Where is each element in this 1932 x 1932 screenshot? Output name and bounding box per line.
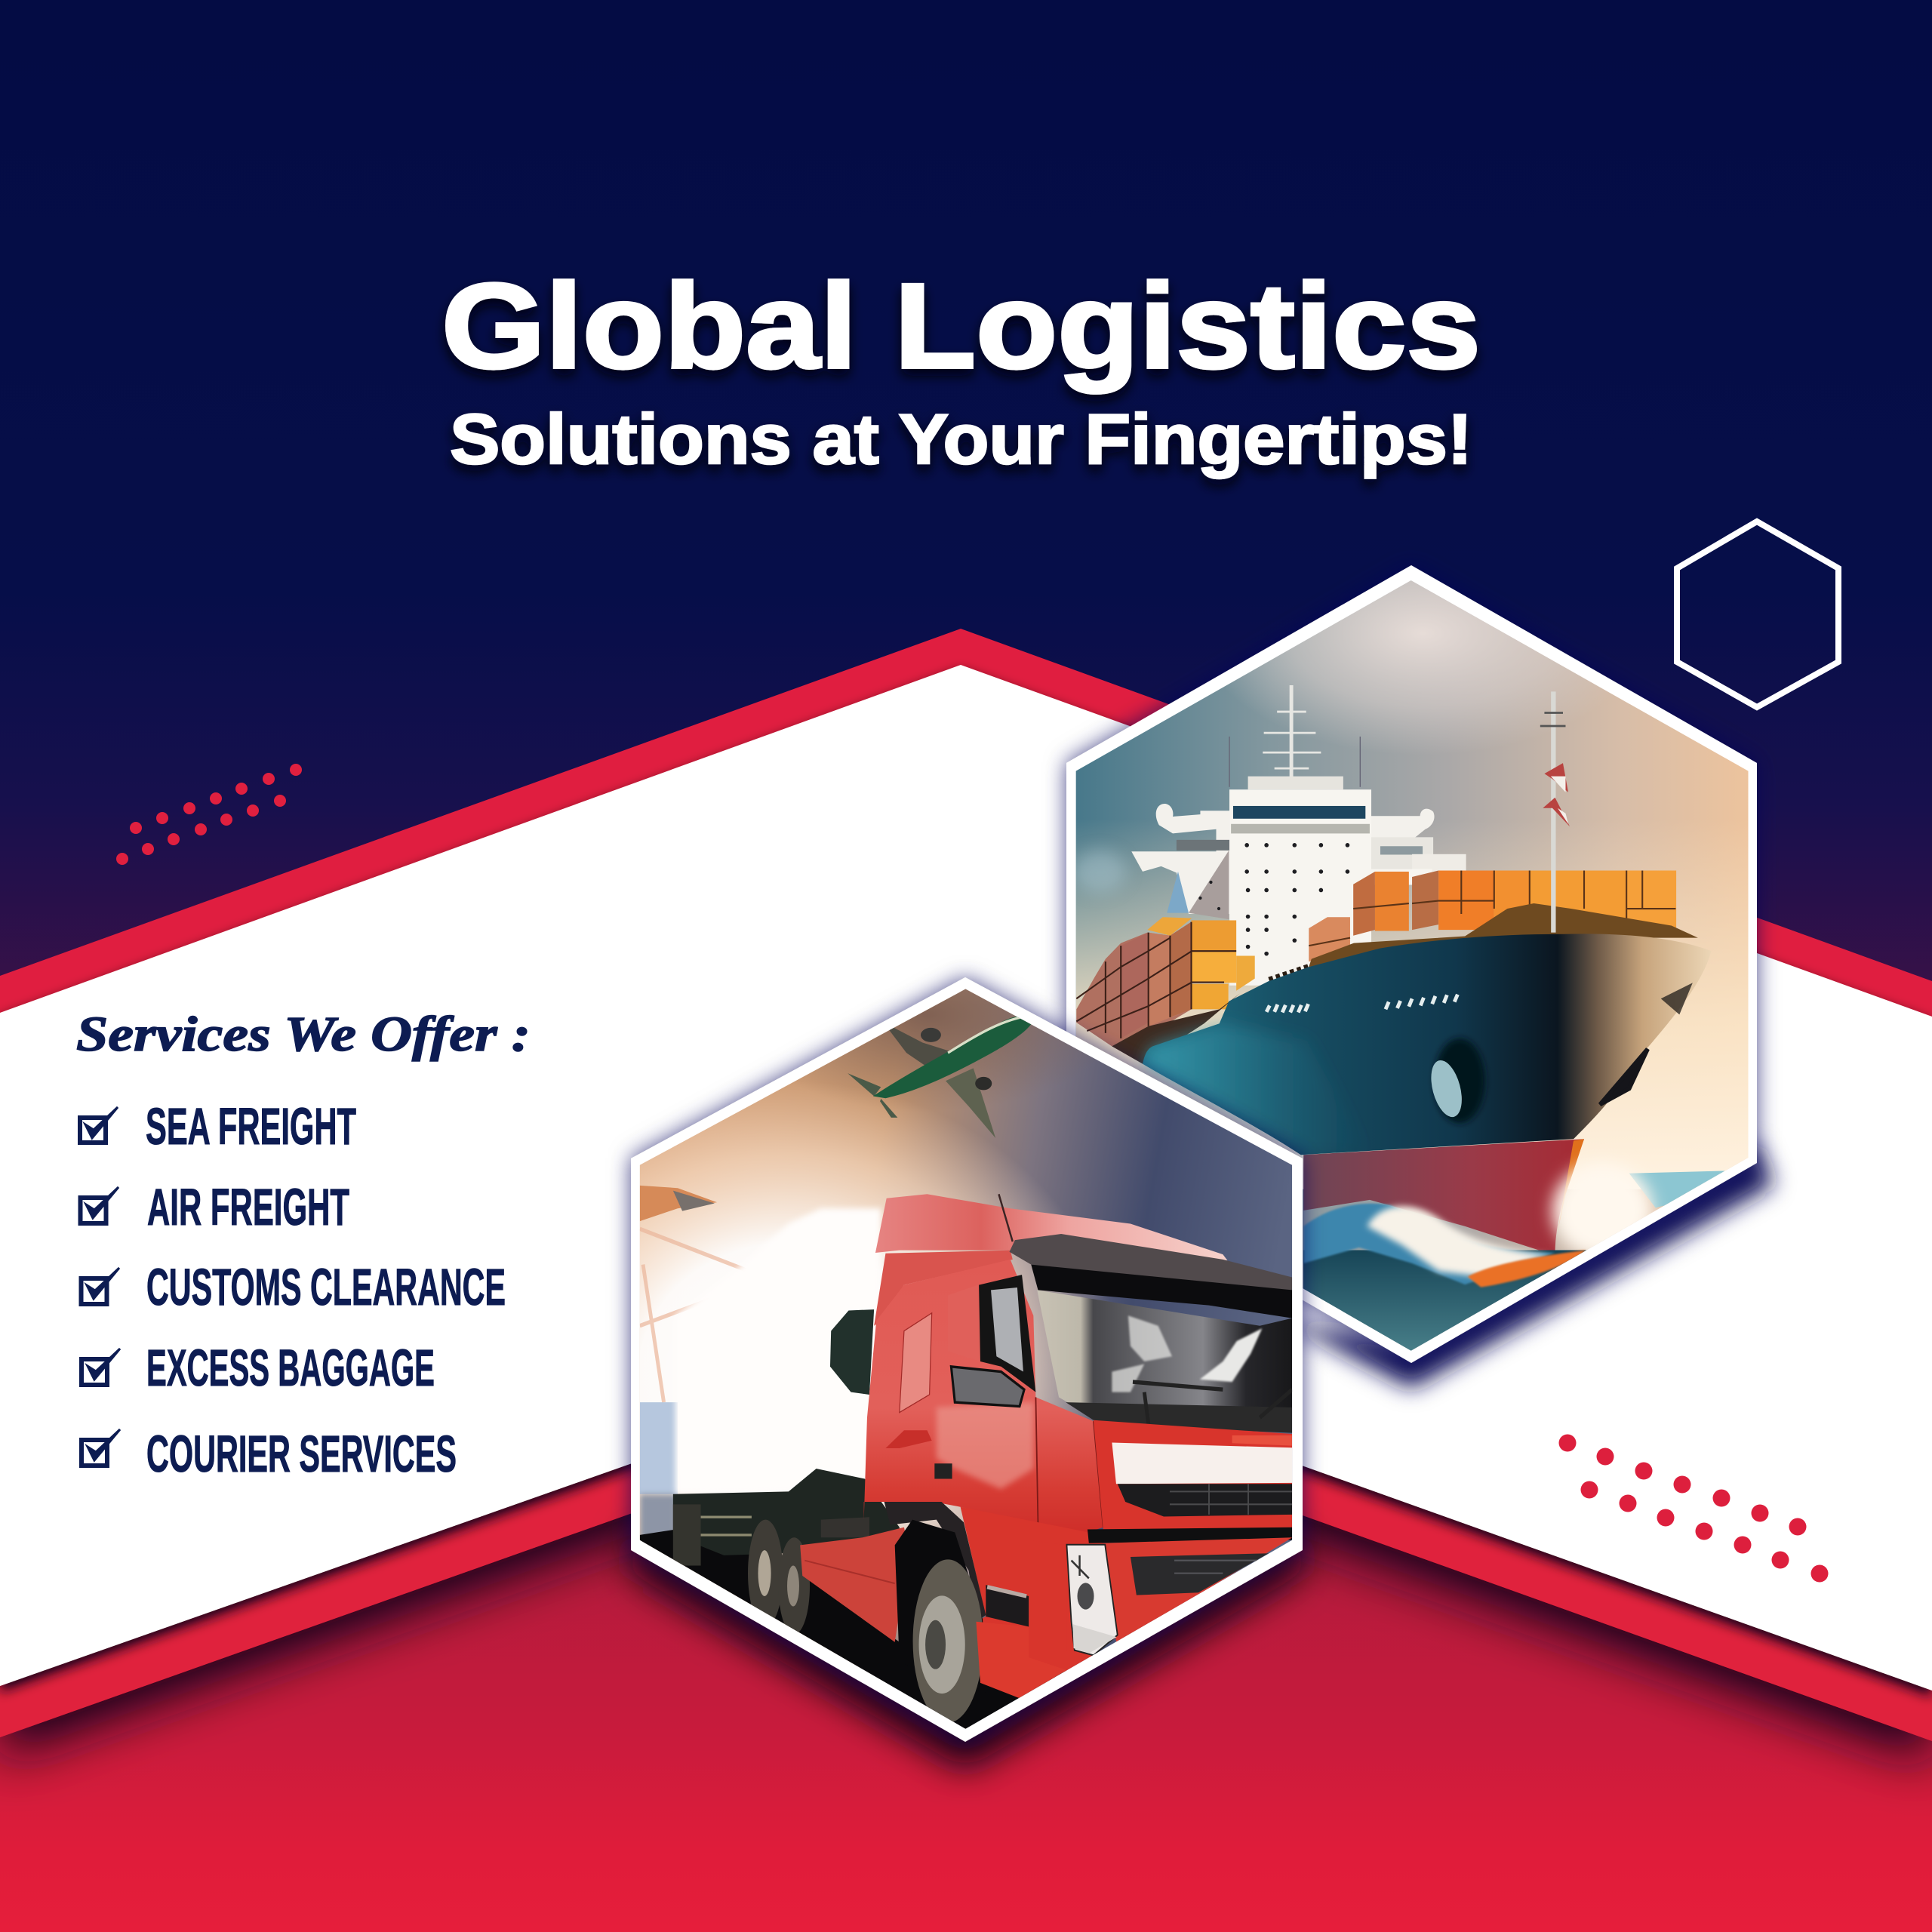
windshield [1037,1290,1292,1433]
lower red chevron band [0,1283,1932,1741]
item: courier services: COURIER SERVICES [146,1425,457,1483]
item: air freight: AIR FREIGHT [147,1178,349,1236]
item: air freight [80,1178,349,1236]
item: excess baggage [82,1339,435,1397]
item: sea freight: SEA FREIGHT [146,1097,356,1155]
airplane [848,1016,1033,1138]
dots: top left [116,764,302,865]
cab side [864,1260,1103,1532]
item: customs clearance [82,1258,506,1316]
dots: bottom right [1559,1434,1828,1582]
rear chassis [640,1469,1070,1734]
navy background [0,0,1932,1072]
hexagon: truck photo [456,918,1303,1770]
lower bumper [1103,1537,1292,1644]
containers: forward stack [1269,871,1698,980]
door highlights [885,1285,1103,1527]
upper red chevron band [0,629,1932,1132]
containers: stern stack [1076,917,1255,1064]
fender and wheel well [884,1502,986,1622]
roof fairing [875,1194,1227,1260]
hexagon: cargo ship photo [1063,512,1774,1389]
hull highlight [1143,1023,1370,1155]
crane [640,1186,752,1545]
bow spray [1303,1163,1674,1367]
services heading: Services We Offer : [76,1007,531,1062]
decorative hexagon outline [1677,521,1838,707]
item: courier services [82,1425,457,1483]
forward mast [1540,691,1570,933]
far sea [1629,1171,1730,1208]
ship hull [1143,934,1711,1155]
silver step [986,1585,1029,1627]
subheading: Solutions at Your Fingertips! [450,399,1472,478]
visor [1010,1234,1292,1310]
hull markings [1266,995,1457,1013]
red lower background [0,1472,1932,1932]
item: customs clearance: CUSTOMS CLEARANCE [146,1258,506,1316]
front wheel [913,1559,983,1723]
services panel [76,1007,531,1483]
white trailer [675,1208,881,1494]
side tank [800,1517,909,1642]
lower cab panel [961,1507,1118,1693]
truck front [1094,1420,1292,1532]
white chevron panel [0,665,1932,1690]
clouds in windshield [1112,1315,1262,1392]
ship superstructure [1131,777,1466,986]
headlight [1066,1545,1118,1655]
orange foam [1468,1251,1586,1287]
ship anchor [1426,1038,1485,1123]
cab mirror [951,1275,1035,1407]
item: excess baggage: EXCESS BAGGAGE [146,1339,435,1397]
title [441,258,1481,478]
item: sea freight [80,1097,356,1155]
ship lower hull [1303,1139,1584,1256]
heading: Global Logistics: Global Logistics [441,258,1481,393]
side fairing window [830,1309,874,1395]
ship mast [1229,685,1360,787]
bumper corner [976,1622,1066,1698]
